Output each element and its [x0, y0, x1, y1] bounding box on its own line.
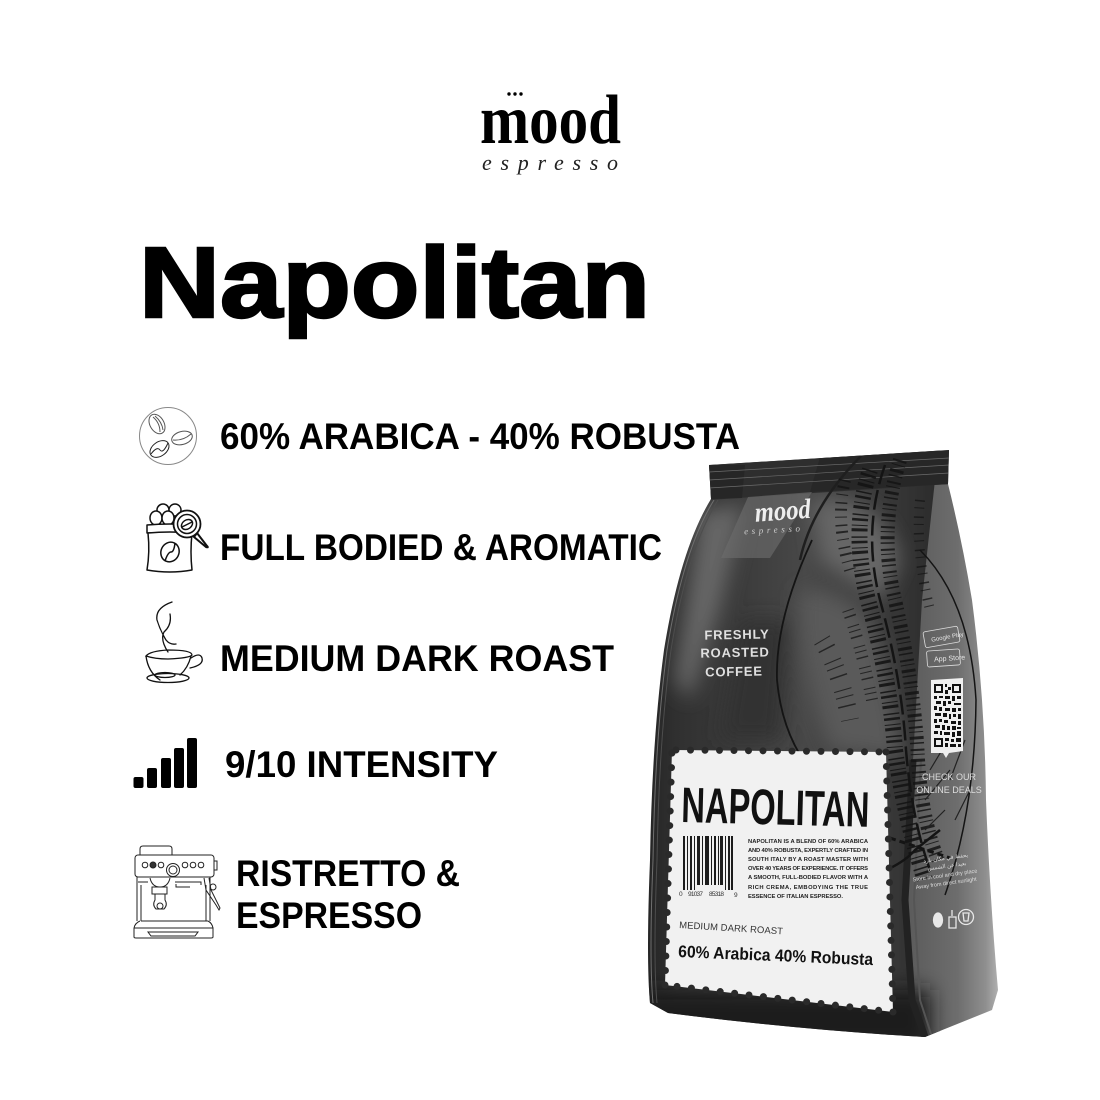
label roast: MEDIUM DARK ROAST [679, 920, 783, 937]
text: brewing [236, 853, 460, 936]
coffee bag [640, 440, 1000, 1050]
store badges: App Store [934, 654, 966, 664]
bag logo: espresso [744, 523, 801, 536]
bag tagline [700, 626, 770, 680]
bag gusset [905, 480, 1000, 1040]
label description: SOUTH ITALY BY A ROAST MASTER WITH [748, 857, 868, 863]
logo patch [721, 492, 812, 558]
label description: OVER 40 YEARS OF EXPERIENCE. IT OFFERS [748, 866, 868, 872]
recycling icons [934, 910, 974, 928]
label: stamp [665, 750, 893, 1012]
label description: ESSENCE OF ITALIAN ESPRESSO. [748, 894, 843, 900]
barcode: 9 [734, 892, 738, 899]
label description: A SMOOTH, FULL-BODIED FLAVOR WITH A [748, 875, 869, 881]
label title: NAPOLITAN [681, 777, 870, 838]
label blend: 60% Arabica 40% Robusta [678, 942, 874, 969]
icon: coffee cup [146, 602, 202, 682]
bag side panel [910, 626, 982, 928]
text: roast: MEDIUM DARK ROAST [220, 638, 614, 679]
feature: roast [146, 602, 614, 682]
icon: coffee beans [140, 408, 196, 464]
text: intensity: 9/10 INTENSITY [225, 744, 498, 785]
label description: NAPOLITAN IS A BLEND OF 60% ARABICA [748, 839, 869, 845]
barcode [679, 836, 738, 899]
bag logo: mood [754, 494, 813, 529]
bag tagline: ROASTED [700, 644, 770, 661]
bag seal [705, 450, 950, 500]
storage text: يحفظ في مكان بارد [923, 852, 969, 865]
label description: RICH CREMA, EMBODYING THE TRUE [748, 885, 868, 891]
storage text: Store in cool and dry place [912, 868, 978, 883]
label description [748, 839, 869, 900]
deals text [916, 772, 982, 795]
bag side pleats [651, 500, 932, 1037]
bean illustration [777, 455, 976, 895]
icon: espresso machine [134, 846, 220, 938]
icon: intensity bars [134, 738, 197, 788]
icon: coffee sack and magnifier [147, 502, 208, 572]
feature: intensity [134, 738, 498, 788]
bag tagline: FRESHLY [704, 626, 770, 643]
barcode: 91037 [688, 891, 703, 898]
text: brewing: RISTRETTO & [236, 853, 460, 894]
store badges: Google Play [931, 632, 964, 644]
barcode: 0 [679, 891, 683, 898]
storage text: بعيدا عن الشمس [927, 860, 967, 872]
storage text: Away from direct sunlight [915, 877, 978, 891]
feature: body [147, 502, 662, 572]
highlights [640, 499, 930, 1050]
text: blend: 60% ARABICA - 40% ROBUSTA [220, 416, 740, 457]
label description: AND 40% ROBUSTA, EXPERTLY CRAFTED IN [748, 848, 868, 854]
bag tagline: COFFEE [705, 663, 763, 680]
bag front [640, 440, 940, 1050]
storage text [910, 851, 979, 891]
barcode: 85318 [709, 891, 724, 898]
bag logo [744, 494, 813, 536]
text: brewing: ESPRESSO [236, 895, 422, 936]
feature: brewing [134, 846, 460, 938]
deals text: CHECK OUR [922, 772, 976, 782]
logo: mood [480, 82, 621, 159]
logo: espresso [482, 150, 618, 175]
text: body: FULL BODIED & AROMATIC [220, 527, 662, 568]
title: Napolitan [139, 227, 650, 339]
feature: blend [140, 408, 740, 464]
store badges [923, 626, 966, 667]
QR code [931, 678, 963, 758]
deals text: ONLINE DEALS [916, 785, 982, 795]
